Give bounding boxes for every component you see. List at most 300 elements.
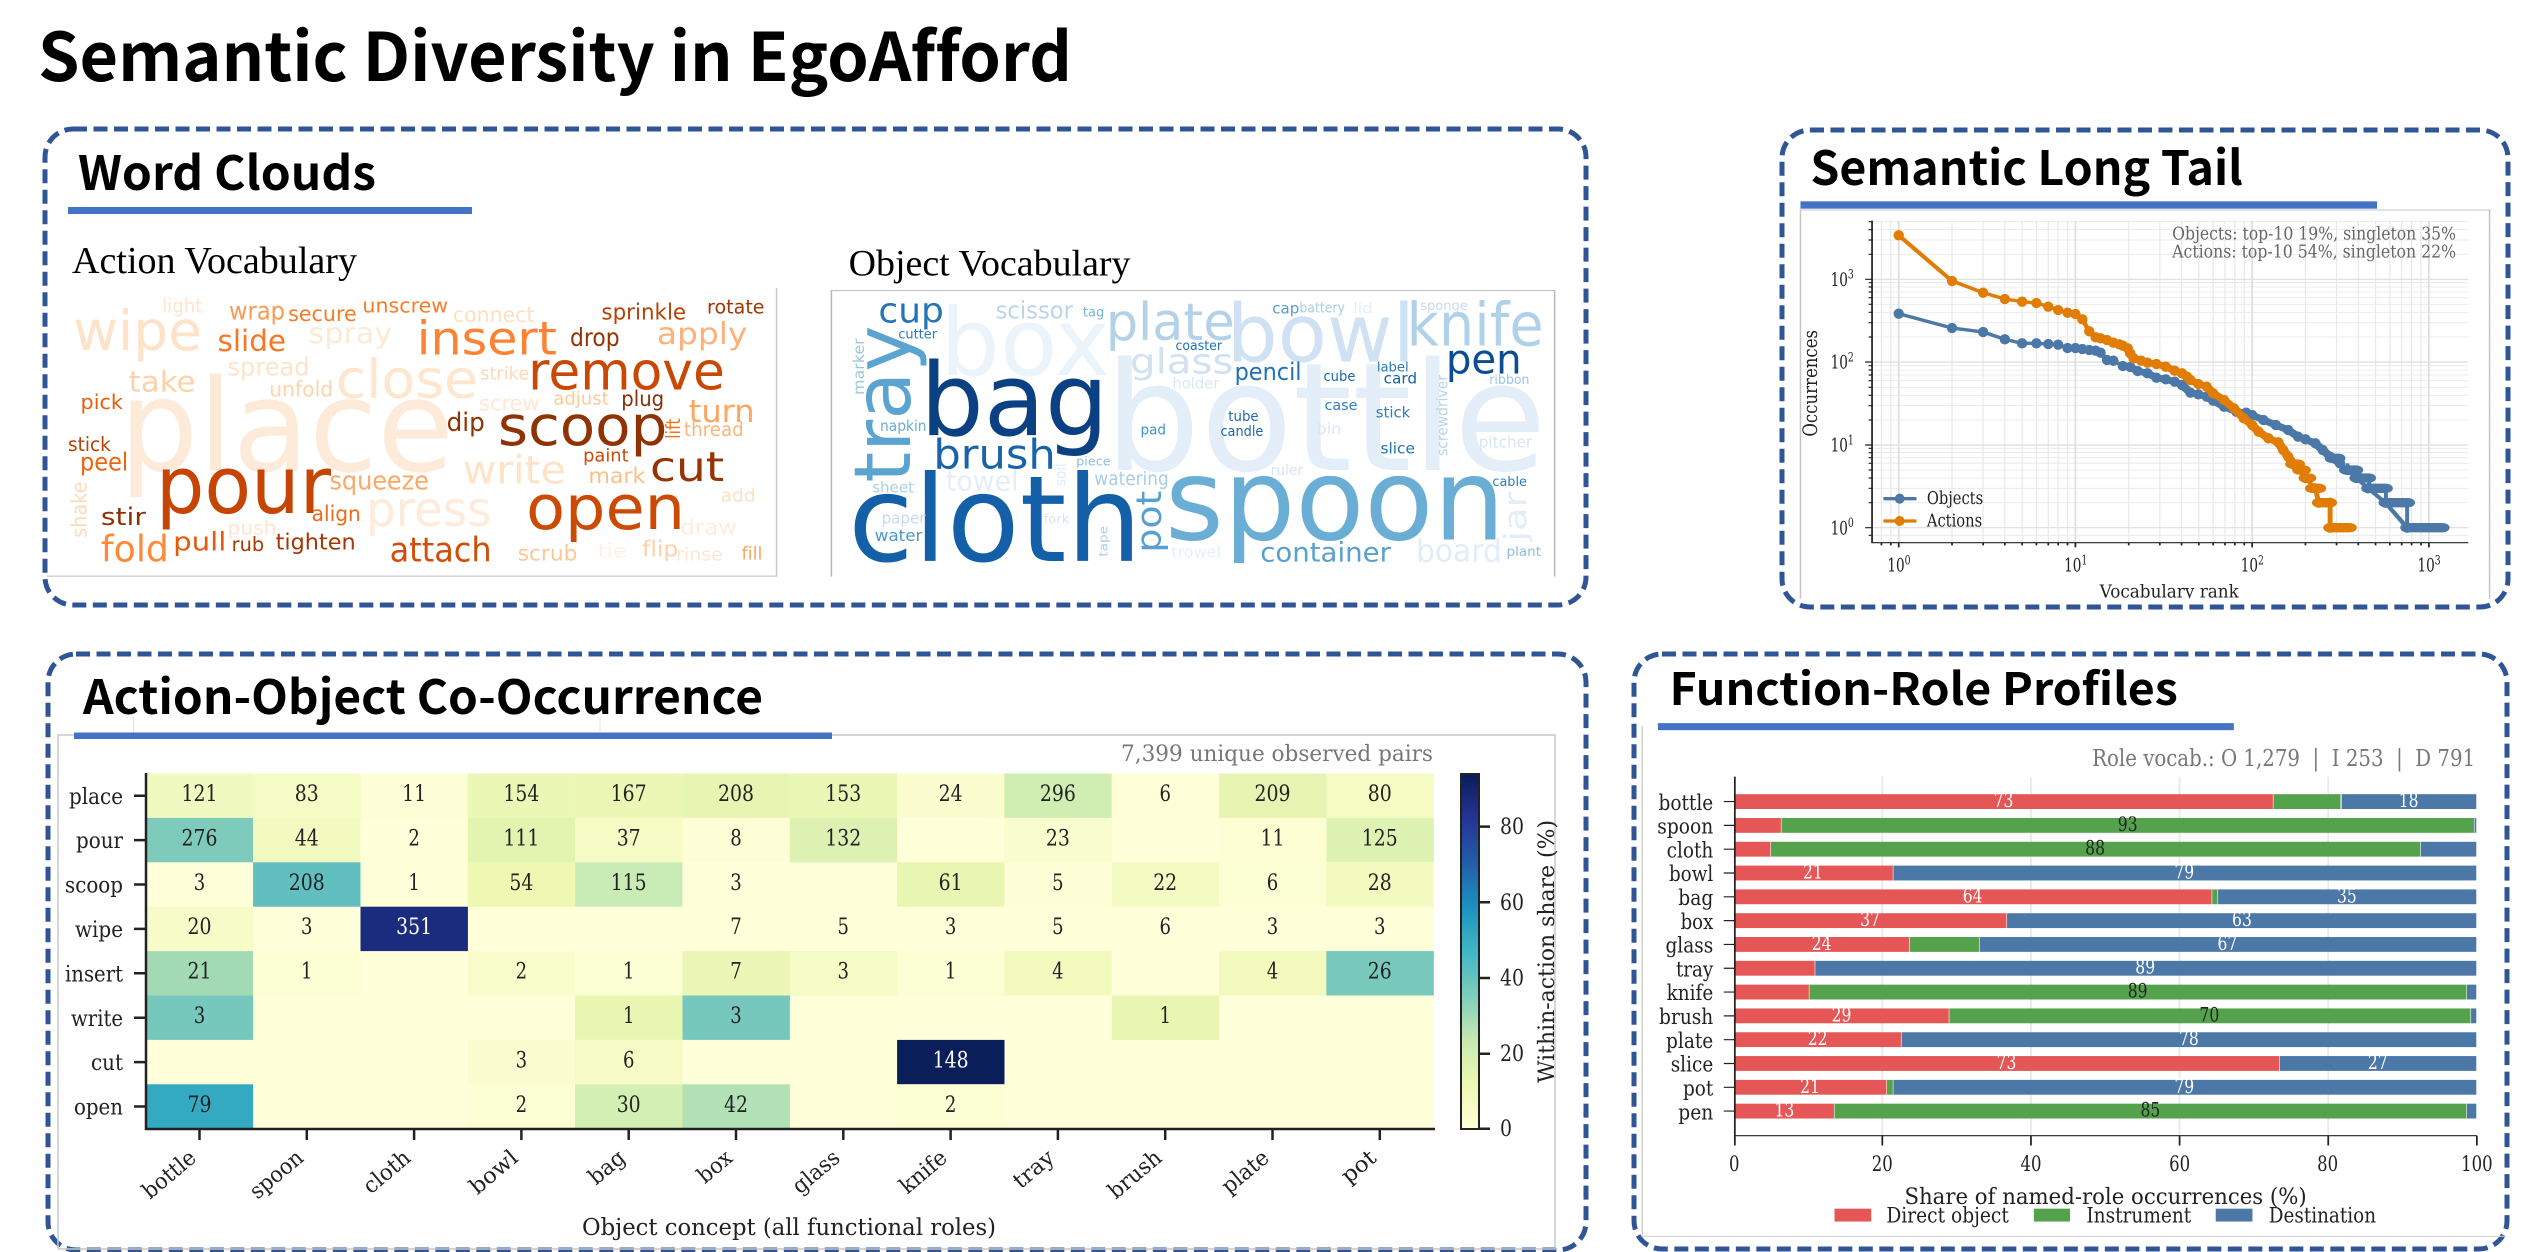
word cloud: objects: ribbon [1489, 373, 1530, 388]
heatmap column labels: cloth [359, 1145, 416, 1199]
word cloud: objects: holder [1172, 374, 1220, 392]
word cloud: objects: pot [1129, 491, 1169, 553]
legend [1883, 488, 1983, 531]
bar: pen: 85 [2141, 1098, 2160, 1121]
bar: bowl: 21 [1803, 860, 1823, 883]
bar: spoon [1735, 813, 2476, 836]
heatmap row labels [65, 785, 123, 1120]
word cloud: actions: stir [101, 503, 146, 531]
word cloud: actions: connect [453, 303, 535, 327]
word cloud: objects: candle [1220, 424, 1263, 440]
word cloud: actions: rinse [676, 544, 723, 565]
x axis tick labels [1887, 552, 2441, 576]
word cloud: actions: close [336, 347, 478, 410]
bar: spoon: 93 [2118, 813, 2138, 836]
word cloud: actions: light [162, 295, 202, 317]
row: scoop: 3 [194, 871, 205, 896]
word cloud: objects: scissor [996, 297, 1073, 324]
heatmap [146, 774, 1434, 1129]
row: place: 167 [611, 782, 647, 807]
row: place: 154 [503, 782, 539, 807]
row: scoop [194, 862, 1434, 907]
word cloud: actions: pick [81, 390, 123, 414]
heatmap column labels: brush [1103, 1145, 1167, 1204]
row: pour: 44 [295, 826, 319, 851]
word cloud: actions: push [227, 518, 277, 540]
row: write [146, 996, 1219, 1040]
word cloud: actions: add [721, 485, 756, 506]
word cloud: objects: bowl [1227, 287, 1415, 381]
word cloud: actions: thread [684, 419, 744, 441]
word cloud: actions: pour [156, 439, 332, 532]
row: wipe: 20 [188, 915, 212, 940]
long tail plot area: 3 [1848, 267, 1854, 282]
row: place: 121 [182, 782, 218, 807]
row: pour: 11 [1260, 826, 1284, 851]
panel: action-object co-occurrence [48, 654, 1586, 1250]
row: pour: 125 [1362, 826, 1398, 851]
row: scoop: 115 [611, 871, 647, 896]
bar: box [1735, 908, 2476, 931]
row: pour: 111 [503, 826, 539, 851]
bar: pen: 13 [1774, 1098, 1794, 1121]
word cloud: actions: pull [173, 527, 226, 557]
row: pour: 8 [730, 826, 742, 851]
long tail plot area: 3 [2435, 552, 2441, 567]
word cloud: objects: towel [946, 465, 1019, 498]
row: place: 208 [718, 782, 754, 807]
word cloud: actions: write [463, 447, 566, 493]
heatmap column labels: pot [1336, 1145, 1382, 1189]
row: scoop: 208 [289, 871, 325, 896]
word cloud: objects: label [1377, 360, 1409, 375]
bar: plate [1735, 1027, 2476, 1050]
word cloud: objects: water [875, 526, 923, 545]
word cloud: actions: align [312, 501, 361, 526]
row: insert: 3 [838, 960, 849, 985]
word cloud: objects: battery [1299, 301, 1345, 316]
word cloud: objects: case [1325, 398, 1357, 414]
word cloud: objects [830, 242, 1556, 590]
word cloud: actions: sprinkle [601, 300, 686, 325]
bar chart row labels: bag [1678, 885, 1713, 911]
heatmap row labels: place [69, 785, 123, 810]
legend: Direct object [1886, 1203, 2009, 1228]
series: actions [1899, 235, 2350, 528]
bar chart x tick labels [1729, 1150, 2493, 1176]
legend: Objects [1927, 488, 1983, 509]
row: wipe: 5 [1052, 915, 1064, 940]
word cloud: objects: sheet [872, 478, 914, 496]
word cloud: objects: cap [1272, 299, 1299, 317]
word cloud: actions: tie [598, 540, 627, 563]
legend: Destination [2269, 1203, 2376, 1228]
heatmap column labels: bowl [465, 1145, 523, 1200]
word cloud: actions: attach [390, 531, 492, 570]
colorbar [1461, 774, 1560, 1142]
row: place: 209 [1254, 782, 1290, 807]
heatmap column labels [138, 1145, 1382, 1204]
word cloud: objects: container [1260, 537, 1391, 569]
heatmap row labels: cut [91, 1051, 123, 1076]
word cloud: actions: cut [650, 444, 724, 491]
word cloud: objects: tube [1228, 409, 1259, 425]
bar: bag: 64 [1963, 884, 1983, 907]
row: pour: 23 [1046, 826, 1070, 851]
row: pour [146, 818, 1434, 862]
bar: plate: 78 [2179, 1027, 2199, 1050]
word cloud: actions [47, 288, 778, 577]
bar chart x tick labels: 60 [2169, 1150, 2190, 1176]
row: scoop: 3 [730, 871, 742, 896]
word cloud: actions: flip [642, 537, 678, 563]
bar: bottle [1735, 789, 2476, 812]
long tail plot area: 0 [1848, 515, 1854, 530]
long tail plot area: 1 [1848, 432, 1854, 447]
word cloud: objects: trowel [1171, 542, 1221, 561]
word cloud: actions: shake [68, 482, 92, 538]
x axis tick labels: 1 [2081, 552, 2087, 567]
word cloud: objects: soil [1053, 463, 1069, 486]
x axis tick labels: 10 [2418, 554, 2435, 576]
bar: pot: 79 [2174, 1075, 2194, 1097]
x axis label: Vocabulary rank [2099, 582, 2239, 602]
heatmap column labels: tray [1008, 1145, 1060, 1194]
word cloud: actions: stick [68, 433, 111, 456]
subheading: object vocabulary: Object Vocabulary [849, 242, 1131, 284]
bar: box: 63 [2232, 908, 2252, 931]
word cloud: actions: scrub [518, 541, 577, 565]
y axis tick labels: 10 [1831, 434, 1848, 456]
word cloud: actions: press [366, 482, 492, 538]
row: place [146, 774, 1434, 818]
word cloud: objects: tag [1083, 305, 1104, 320]
heatmap row labels: open [74, 1096, 123, 1120]
bar chart row labels: bowl [1669, 861, 1713, 887]
word cloud: actions: take [129, 365, 196, 398]
bar chart row labels: slice [1671, 1051, 1713, 1077]
bar: glass: 24 [1812, 932, 1832, 955]
word cloud: objects: screwdriver [1434, 374, 1451, 456]
colorbar: 60 [1500, 891, 1524, 916]
bar chart row labels: cloth [1667, 837, 1713, 863]
row: place: 80 [1368, 782, 1392, 807]
word cloud: objects: napkin [880, 417, 927, 435]
panel: semantic long tail [1782, 130, 2508, 607]
y axis tick labels: 10 [1831, 351, 1848, 373]
word cloud: actions: paint [583, 445, 629, 467]
colorbar label: Within-action share (%) [1535, 820, 1560, 1083]
x axis tick labels: 2 [2258, 552, 2264, 567]
word cloud: actions: place [119, 353, 454, 501]
bar: slice [1735, 1051, 2476, 1074]
bar: knife [1735, 979, 2476, 1002]
row: wipe: 3 [1374, 915, 1386, 940]
row: place: 6 [1159, 782, 1171, 807]
bar chart row labels: tray [1676, 956, 1713, 982]
bar: bowl: 79 [2174, 860, 2194, 883]
word cloud: actions: fill [742, 543, 762, 565]
bar chart x tick labels: 40 [2020, 1150, 2041, 1176]
heatmap column labels: glass [788, 1145, 845, 1199]
word cloud: actions: insert [417, 311, 557, 366]
bar: bottle: 73 [1994, 789, 2013, 812]
series: objects [1899, 314, 2443, 528]
heatmap row labels: wipe [75, 918, 123, 943]
row: insert: 1 [301, 960, 313, 985]
heading underline: co-occurrence [74, 732, 832, 739]
bar: slice: 27 [2368, 1051, 2388, 1074]
word cloud: objects: fork [1044, 512, 1070, 527]
colorbar: 20 [1500, 1042, 1524, 1067]
word cloud: actions: draw [680, 515, 737, 540]
row: place: 11 [402, 782, 426, 807]
bar: pot: 21 [1800, 1075, 1820, 1097]
word cloud: objects: brush [933, 430, 1056, 478]
heatmap column labels: spoon [245, 1145, 309, 1204]
word cloud: actions: mark [588, 464, 646, 488]
row: scoop: 6 [1267, 871, 1278, 896]
bar: bottle: 18 [2399, 789, 2419, 812]
word cloud: actions: plug [621, 386, 664, 411]
bar: brush: 70 [2199, 1003, 2219, 1026]
bar chart row labels [1657, 789, 1713, 1125]
word cloud: objects: slice [1380, 439, 1415, 457]
word cloud: objects: pencil [1235, 359, 1302, 386]
row: pour: 132 [825, 826, 861, 851]
row: write: 1 [1159, 1004, 1171, 1029]
word cloud: actions: screw [479, 391, 540, 416]
word cloud: objects: ruler [1271, 463, 1303, 479]
x axis tick labels: 10 [2064, 554, 2081, 576]
word cloud: objects: piece [1076, 454, 1111, 469]
bar: pot [1735, 1075, 2476, 1097]
row: wipe: 3 [301, 915, 313, 940]
bar chart x tick labels: 0 [1729, 1150, 1739, 1176]
word cloud: objects: sponge [1420, 299, 1468, 314]
word cloud: actions: unscrew [362, 294, 448, 317]
row: wipe [146, 907, 1386, 951]
row: insert [146, 951, 1434, 996]
colorbar: 0 [1500, 1117, 1512, 1142]
title: Semantic Diversity in EgoAfford [38, 4, 1072, 101]
heatmap column labels: bottle [138, 1145, 201, 1204]
row: insert: 1 [945, 960, 956, 985]
bar: brush [1735, 1003, 2476, 1026]
heading: action-object co-occurrence: Action-Object Co-Occurrence [82, 659, 763, 728]
bar: glass: 67 [2217, 932, 2237, 955]
heatmap row labels: pour [76, 829, 123, 854]
word cloud: objects: bin [1317, 420, 1341, 438]
bar chart row labels: brush [1659, 1004, 1713, 1030]
bar: slice: 73 [1997, 1051, 2016, 1074]
bar chart row labels: plate [1666, 1027, 1713, 1053]
bar: glass [1735, 932, 2476, 955]
word cloud: objects: plate [1106, 293, 1235, 353]
row: scoop: 1 [408, 871, 420, 896]
heatmap row labels: scoop [65, 874, 123, 898]
x axis tick labels: 10 [1887, 554, 1905, 576]
row: place: 296 [1040, 782, 1076, 807]
row: wipe: 3 [945, 915, 956, 940]
word cloud: objects: bag [920, 342, 1109, 459]
word cloud: objects: box [940, 288, 1110, 397]
row: place: 24 [939, 782, 963, 807]
word cloud: objects: watering [1094, 468, 1169, 490]
y axis label: Occurrences [1799, 330, 1821, 437]
legend [1835, 1203, 2376, 1228]
row: open: 2 [945, 1093, 956, 1118]
word cloud: actions: secure [288, 301, 357, 326]
bar: pen [1735, 1098, 2476, 1121]
heading underline: semantic long tail [1800, 201, 2377, 209]
row: scoop: 54 [509, 871, 533, 896]
bar: tray: 89 [2135, 956, 2155, 978]
row: open: 30 [617, 1093, 641, 1118]
word cloud: actions: wrap [229, 296, 285, 325]
word cloud: actions: dip [447, 408, 485, 438]
word cloud: actions: rub [232, 533, 264, 556]
legend: Instrument [2086, 1203, 2191, 1228]
bar: tray [1735, 956, 2476, 978]
bar chart row labels: pen [1678, 1099, 1713, 1125]
word cloud: objects: card [1384, 370, 1417, 387]
word cloud: actions: tighten [276, 529, 356, 556]
y axis tick labels [1831, 267, 1854, 539]
row: pour: 2 [408, 826, 420, 851]
heatmap column labels: plate [1217, 1145, 1274, 1199]
word cloud: objects: paper [882, 508, 926, 527]
bar: cloth: 88 [2085, 837, 2105, 859]
word cloud: actions: scoop [498, 395, 667, 458]
bar chart row labels: bottle [1658, 789, 1713, 815]
word cloud: actions: apply [657, 317, 747, 352]
word cloud: objects: cup [878, 290, 944, 331]
bar chart row labels: glass [1665, 932, 1713, 958]
heatmap column labels: box [693, 1145, 738, 1189]
row: insert: 7 [730, 960, 742, 985]
row: wipe: 5 [838, 915, 849, 940]
row: open: 2 [516, 1093, 527, 1118]
bar chart x tick labels: 20 [1872, 1150, 1893, 1176]
word cloud: actions: lift [663, 418, 685, 439]
row: open: 79 [188, 1093, 212, 1118]
heatmap row labels: write [71, 1007, 123, 1032]
heading: word clouds: Word Clouds [78, 135, 376, 204]
bar: knife: 89 [2128, 979, 2148, 1002]
row: insert: 4 [1267, 960, 1278, 985]
row: cut [468, 1040, 1004, 1084]
row: write: 3 [194, 1004, 205, 1029]
bar chart row labels: knife [1667, 980, 1713, 1006]
heatmap row labels: insert [65, 962, 123, 988]
row: cut: 148 [933, 1048, 969, 1073]
row: cut: 6 [623, 1048, 634, 1073]
stats annotation [2171, 224, 2456, 262]
word cloud: objects: jar [1498, 491, 1534, 543]
word cloud: actions: unfold [269, 377, 333, 402]
long tail plot area: 2 [1848, 349, 1854, 364]
word cloud: actions: squeeze [329, 466, 429, 496]
heatmap column labels: knife [895, 1145, 952, 1199]
heading: function-role profiles: Function-Role Profiles [1670, 654, 2178, 719]
row: pour: 37 [617, 826, 641, 851]
panel: word clouds [45, 129, 1586, 605]
row: wipe: 351 [396, 915, 432, 940]
word cloud: objects: lid [1353, 299, 1373, 317]
bar: bag: 35 [2337, 884, 2357, 907]
y axis tick labels: 10 [1831, 517, 1848, 539]
subheading: action vocabulary: Action Vocabulary [72, 240, 357, 282]
row: insert: 2 [516, 960, 527, 985]
word cloud: objects: coaster [1175, 339, 1223, 354]
bar: brush: 29 [1832, 1003, 1851, 1026]
word cloud: actions: fold [101, 528, 169, 571]
word cloud: objects: tape [1097, 526, 1111, 557]
word cloud: objects: glass [1130, 341, 1234, 382]
word cloud: objects: cable [1492, 475, 1527, 490]
bar: bowl [1735, 860, 2476, 883]
stacked bar chart area [1641, 654, 2506, 1237]
row: wipe: 3 [1267, 915, 1278, 940]
row: insert: 21 [188, 960, 212, 985]
heading underline: function-role profiles [1658, 723, 2234, 730]
row: place: 153 [825, 782, 861, 807]
note: unique pairs: 7,399 unique observed pairs [1121, 741, 1433, 767]
bar chart row labels: spoon [1657, 813, 1713, 839]
legend: Actions [1926, 511, 1982, 531]
colorbar: 80 [1500, 815, 1524, 840]
row: scoop: 28 [1368, 871, 1392, 896]
row: cut: 3 [516, 1048, 527, 1073]
bar chart x tick labels: 80 [2317, 1150, 2338, 1176]
row: write: 3 [730, 1004, 742, 1029]
word cloud: actions: spray [309, 317, 392, 350]
long tail plot area [1799, 131, 2490, 599]
row: wipe: 7 [730, 915, 742, 940]
heading underline: word clouds [68, 207, 472, 214]
word cloud: objects: stick [1376, 403, 1411, 421]
bar: bag [1735, 884, 2476, 907]
word cloud: actions: wipe [73, 300, 202, 364]
row: insert: 26 [1368, 960, 1392, 985]
word cloud: objects: pad [1140, 422, 1166, 438]
panel: function-role profiles [1634, 654, 2507, 1249]
word cloud: objects: board [1416, 533, 1502, 569]
row: write: 1 [623, 1004, 634, 1029]
word cloud: actions: strike [480, 363, 529, 385]
heatmap column labels: bag [584, 1145, 631, 1190]
word cloud: objects: marker [849, 337, 867, 395]
row: scoop: 5 [1052, 871, 1064, 896]
bar: box: 37 [1860, 908, 1880, 931]
x axis tick labels: 10 [2241, 554, 2258, 576]
word cloud: actions: spread [227, 352, 310, 382]
row: open [146, 1084, 1005, 1129]
row: scoop: 22 [1153, 871, 1177, 896]
word cloud: actions: peel [80, 448, 128, 477]
word cloud: actions: adjust [553, 388, 609, 410]
row: pour: 276 [182, 826, 218, 851]
word cloud: actions: turn [689, 393, 755, 430]
heatmap x axis label: Object concept (all functional roles) [582, 1215, 996, 1241]
colorbar: 40 [1500, 966, 1524, 992]
word cloud: actions: slide [218, 325, 286, 359]
word cloud: objects: tray [837, 325, 929, 483]
y axis tick labels: 10 [1831, 269, 1848, 291]
row: place: 83 [295, 782, 319, 807]
heading: semantic long tail: Semantic Long Tail [1810, 131, 2243, 199]
